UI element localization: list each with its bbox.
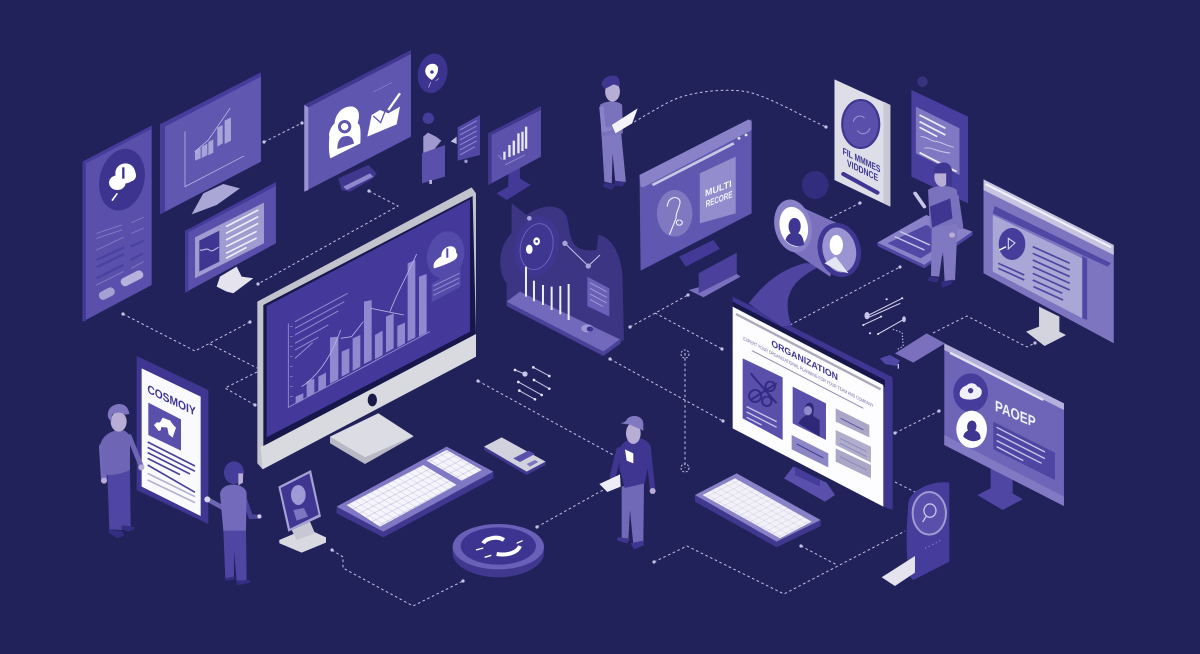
monitor: lock and mail [304,50,411,192]
bar chart [288,254,430,407]
dark dot [802,171,829,199]
icon: loop arrows [483,538,520,554]
heading: FIL MMMES [843,146,880,175]
monitor: document and line chart [185,182,276,293]
monitor stand [977,467,1023,510]
icon: gear and wrench [154,418,176,438]
icon: padlock with person [329,106,361,158]
icon: network scissors [749,373,777,406]
laptop stand [689,253,741,297]
monitor: growth chart [160,72,261,214]
icon: cloud badge [953,373,988,412]
browser monitor: MULTI RECORE: RECORE [706,190,732,210]
white organisation monitor: EXPERT YOUR ORGANIZATIONAL PLANNING FOR YOUR TEAM AND COMPANY [743,336,874,410]
small top dot [917,76,928,87]
person: man pointing [204,461,261,585]
heading: COSMOIY [147,382,196,419]
icon: cloud badge [422,227,469,283]
monitor stand [330,413,413,464]
poster: COSMOIY [137,356,208,524]
monitor: PAOEP [944,343,1064,510]
analytics hologram [500,203,624,356]
circuit icons right [862,297,906,349]
small desk device [880,333,945,369]
top centre person with paper [600,76,638,190]
monitor: right browser [984,179,1114,346]
icon: play badge [999,228,1025,260]
heading: PAOEP [995,398,1036,432]
small person with clipboard [422,113,445,184]
panel: flow document [911,90,968,203]
white organisation monitor [733,297,893,510]
tablet base [877,215,972,268]
disc button [453,524,544,577]
heading: ORGANIZATION [771,338,838,383]
monitor stand [1026,307,1066,346]
main monitor [257,187,476,469]
tall profile panel [83,126,152,322]
person: woman with tablet [915,163,960,288]
icon: envelope with check [367,93,400,137]
icon: avatar [798,403,820,437]
avatar projector [749,197,866,327]
icon: magnifier [923,504,936,522]
kiosk with search [882,482,949,586]
monitor stand [784,467,835,502]
poster: circle card [834,79,890,207]
icon: light bulb badge [414,51,451,96]
small document [451,115,480,163]
connector lines [121,90,1037,606]
icon: avatar badge [956,411,987,448]
icon: stethoscope badge [657,190,692,237]
icon: cloud badge [93,144,151,215]
person: man with card [599,416,656,549]
poster: circle card: VIDDNCE [847,158,878,184]
monitor: small bar chart [488,106,541,200]
keyboard right [695,473,821,547]
circuit icons left [514,366,551,401]
heading: MULTI [705,179,732,199]
keyboard left [337,447,493,537]
person: man at poster [101,404,144,538]
logo [368,394,377,406]
small stand display [278,470,326,553]
phone [484,437,546,475]
browser monitor: MULTI RECORE [640,119,752,271]
